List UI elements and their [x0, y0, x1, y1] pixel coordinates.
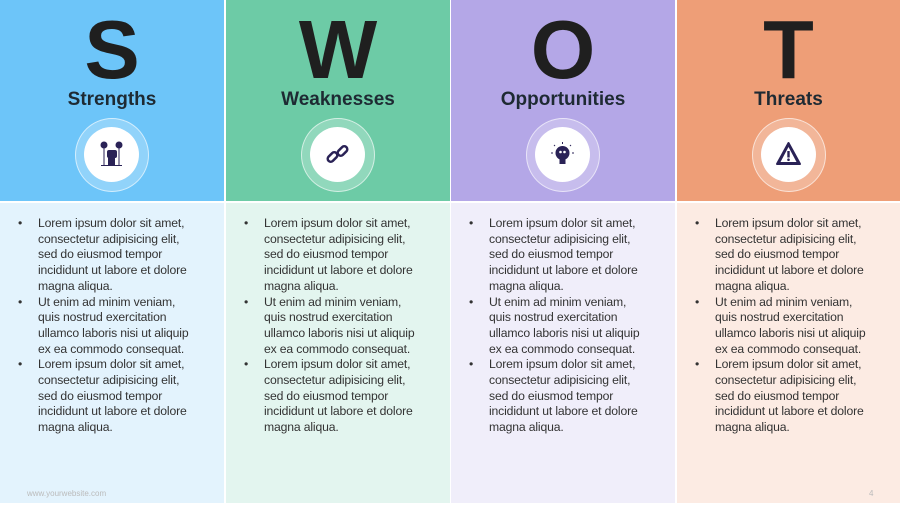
panel: weaknesses	[226, 0, 450, 503]
text: threats bullets: quis nostrud exercitation	[715, 310, 843, 324]
text: threats bullets: Ut enim ad minim veniam,	[715, 295, 852, 309]
text: opportunities bullets: Lorem ipsum dolor sit amet,	[489, 216, 635, 230]
text: threats bullets: incididunt ut labore et dolore	[715, 263, 864, 277]
text: threats bullets: sed do eiusmod tempor	[715, 247, 839, 261]
text: strengths bullets: sed do eiusmod tempor	[38, 247, 162, 261]
text: weaknesses bullets: sed do eiusmod tempor	[264, 247, 388, 261]
text: threats bullets: Lorem ipsum dolor sit amet,	[715, 357, 861, 371]
text: threats bullets: ullamco laboris nisi ut aliquip	[715, 326, 865, 340]
text: weaknesses bullets: incididunt ut labore et dolore	[264, 263, 413, 277]
heading: Weaknesses: Weaknesses	[281, 89, 395, 110]
text: opportunities bullets: ex ea commodo consequat.	[489, 342, 635, 356]
icon: broken chain	[301, 118, 375, 192]
text: strengths bullets: magna aliqua.	[38, 279, 113, 293]
text: weaknesses bullets: quis nostrud exercitation	[264, 310, 392, 324]
text: threats bullets: incididunt ut labore et dolore	[715, 404, 864, 418]
text: weaknesses bullets: magna aliqua.	[264, 279, 339, 293]
letter O: O	[531, 3, 595, 96]
letter S: S	[84, 3, 140, 96]
text: opportunities bullets: Lorem ipsum dolor sit amet,	[489, 357, 635, 371]
text: threats bullets: consectetur adipisicing elit,	[715, 373, 856, 387]
text: weaknesses bullets: incididunt ut labore et dolore	[264, 404, 413, 418]
text: weaknesses bullets: sed do eiusmod tempor	[264, 389, 388, 403]
text: opportunities bullets: ullamco laboris nisi ut aliquip	[489, 326, 639, 340]
text: strengths bullets: sed do eiusmod tempor	[38, 389, 162, 403]
text: opportunities bullets: Ut enim ad minim veniam,	[489, 295, 626, 309]
text: weaknesses bullets: consectetur adipisicing elit,	[264, 373, 405, 387]
icon: light bulb	[526, 118, 600, 192]
text: strengths bullets: incididunt ut labore et dolore	[38, 404, 187, 418]
icon: fist with coins	[75, 118, 149, 192]
heading: Opportunities: Opportunities	[501, 89, 625, 110]
text: opportunities bullets: sed do eiusmod tempor	[489, 389, 613, 403]
text: strengths bullets: Ut enim ad minim veniam,	[38, 295, 175, 309]
text: strengths bullets: quis nostrud exercitation	[38, 310, 166, 324]
text: opportunities bullets: magna aliqua.	[489, 279, 564, 293]
text: opportunities bullets: sed do eiusmod tempor	[489, 247, 613, 261]
text: strengths bullets	[18, 216, 188, 434]
text: opportunities bullets: magna aliqua.	[489, 420, 564, 434]
footer: page number: 4	[869, 489, 873, 498]
text: strengths bullets: ullamco laboris nisi ut aliquip	[38, 326, 188, 340]
text: opportunities bullets	[470, 216, 640, 434]
text: opportunities bullets: incididunt ut labore et dolore	[489, 404, 638, 418]
text: threats bullets	[696, 216, 866, 434]
text: opportunities bullets: consectetur adipisicing elit,	[489, 232, 630, 246]
text: opportunities bullets: incididunt ut labore et dolore	[489, 263, 638, 277]
text: weaknesses bullets: consectetur adipisicing elit,	[264, 232, 405, 246]
footer: website: www.yourwebsite.com	[27, 489, 106, 498]
text: strengths bullets: ex ea commodo consequat.	[38, 342, 184, 356]
text: weaknesses bullets	[244, 216, 414, 434]
letter W: W	[299, 3, 377, 96]
text: opportunities bullets: quis nostrud exercitation	[489, 310, 617, 324]
text: opportunities bullets: consectetur adipisicing elit,	[489, 373, 630, 387]
text: strengths bullets: consectetur adipisicing elit,	[38, 373, 179, 387]
panel: strengths	[0, 0, 224, 503]
text: weaknesses bullets: ullamco laboris nisi ut aliquip	[264, 326, 414, 340]
text: strengths bullets: Lorem ipsum dolor sit amet,	[38, 216, 184, 230]
text: weaknesses bullets: Ut enim ad minim veniam,	[264, 295, 401, 309]
panel: opportunities	[451, 0, 675, 503]
text: weaknesses bullets: Lorem ipsum dolor sit amet,	[264, 216, 410, 230]
heading: Strengths: Strengths	[68, 89, 156, 110]
text: strengths bullets: incididunt ut labore et dolore	[38, 263, 187, 277]
letter T: T	[763, 3, 814, 96]
text: threats bullets: ex ea commodo consequat.	[715, 342, 861, 356]
text: threats bullets: Lorem ipsum dolor sit amet,	[715, 216, 861, 230]
text: threats bullets: magna aliqua.	[715, 279, 790, 293]
heading: Threats: Threats	[754, 89, 823, 110]
text: weaknesses bullets: ex ea commodo consequat.	[264, 342, 410, 356]
text: threats bullets: magna aliqua.	[715, 420, 790, 434]
text: strengths bullets: Lorem ipsum dolor sit amet,	[38, 357, 184, 371]
panel: threats	[677, 0, 900, 503]
text: weaknesses bullets: Lorem ipsum dolor sit amet,	[264, 357, 410, 371]
text: threats bullets: consectetur adipisicing elit,	[715, 232, 856, 246]
text: threats bullets: sed do eiusmod tempor	[715, 389, 839, 403]
text: strengths bullets: consectetur adipisicing elit,	[38, 232, 179, 246]
icon: warning triangle	[752, 118, 826, 192]
text: strengths bullets: magna aliqua.	[38, 420, 113, 434]
text: weaknesses bullets: magna aliqua.	[264, 420, 339, 434]
